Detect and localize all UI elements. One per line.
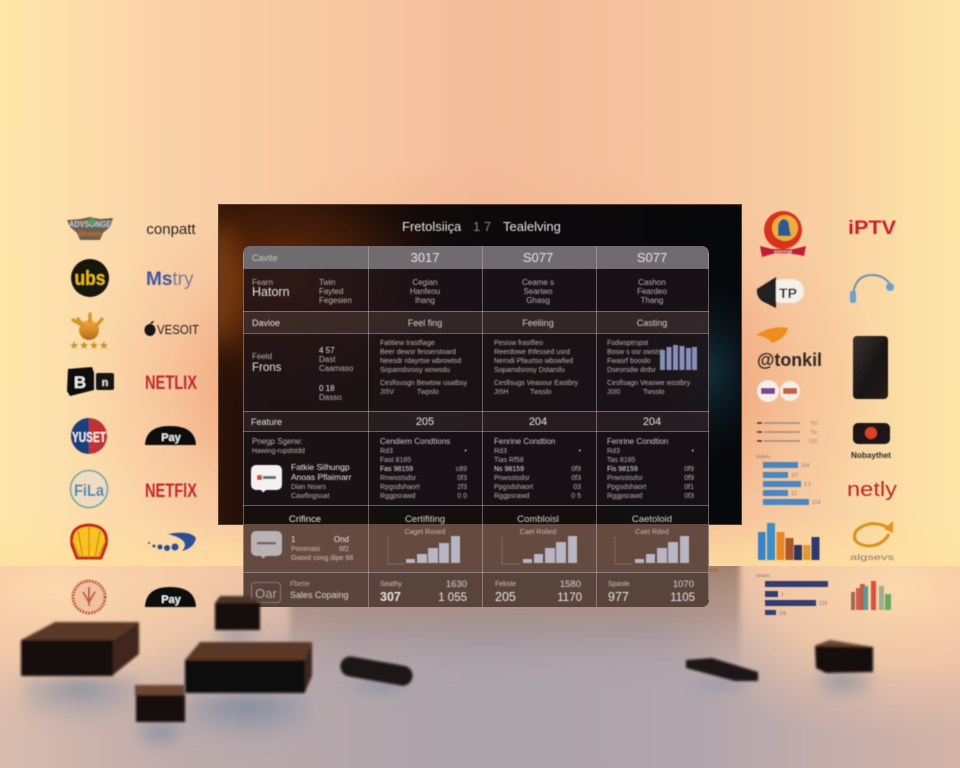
logo: Pay dome lower — [145, 587, 196, 607]
row: device details: 4 57 — [319, 346, 335, 355]
logo: orange swoosh — [756, 327, 788, 343]
bar chart column 1 — [388, 536, 460, 564]
television title — [402, 219, 561, 234]
row: platform: Cashon — [638, 278, 666, 287]
horizontal bar chart blue: 214 — [812, 500, 821, 506]
row: features details: • — [579, 448, 582, 455]
row: features details: Cawfingsuat — [291, 493, 330, 500]
row: sales figures: Fbette — [290, 581, 310, 588]
horizontal bar chart blue: 1:1 — [804, 482, 811, 488]
row: platform: Hatorn — [252, 285, 290, 299]
logo: shell — [72, 525, 106, 558]
row: sales figures: Sales Copaing — [290, 590, 349, 600]
row: certification charts: Caet Rded — [635, 529, 669, 536]
row: device details: JI5H — [494, 389, 508, 396]
logo: red badge with ribbon: pocnal — [774, 250, 792, 256]
row: platform: Fearn — [252, 278, 273, 287]
row: features details: Anoas Pflaimarr — [291, 472, 352, 482]
television title: Tealelving — [503, 219, 561, 234]
icon: smartphone — [853, 336, 888, 399]
box: right — [815, 640, 873, 673]
row: device details: 0 18 — [319, 384, 335, 393]
row: features details: 0f3 — [457, 475, 467, 482]
row: features heading: Feature — [251, 417, 282, 427]
logo: BN — [67, 367, 114, 396]
row: certification charts: 6f2 — [339, 546, 349, 553]
row: device details: Twpslo — [417, 389, 439, 396]
logo: gold mascot with stars: ★★★★ — [69, 340, 109, 352]
logo: red badge with ribbon — [760, 211, 806, 257]
row: features details: Rggpsrawd — [607, 493, 643, 500]
row: certification charts: Caget Roved — [405, 529, 446, 536]
television title: 1 7 — [473, 219, 491, 234]
logo: VESOIT wordmark — [144, 321, 199, 337]
row: device details: Dast — [319, 355, 336, 364]
logo: red TV: Nobaythet — [851, 451, 891, 460]
legend list — [757, 421, 817, 445]
row: features details: Rd3 — [380, 448, 393, 455]
row: features details: 0f3 — [684, 493, 694, 500]
logo: tonkil: @tonkil — [757, 350, 822, 370]
row: device details: Beer dewsr fesserstoard — [380, 349, 456, 356]
row: features details: Pnwsstsdsr — [607, 475, 643, 482]
logo: NETFLIX: NETFlX — [145, 481, 197, 502]
row: features details: Hawing-rupdstdd — [252, 448, 305, 455]
horizontal bar chart navy: Details — [756, 573, 771, 578]
row: device details: Bosw s osr owstsl — [607, 349, 663, 356]
table header row: S077 — [637, 250, 667, 265]
row: device details: J0I0 — [607, 389, 620, 396]
icon: gray chat bubble — [251, 531, 282, 558]
row: sales figures: 1105 — [670, 592, 695, 604]
row: features details: Rggpsrawd — [494, 493, 530, 500]
row: features details: Fatkie Silhungp — [291, 462, 350, 472]
row: sales figures: 205 — [495, 590, 516, 604]
mini bar chart in table — [660, 345, 697, 370]
row: device details: Cesfisagn Veaswe wsstbry — [607, 380, 691, 387]
legend list: 7Io — [810, 430, 817, 436]
row: features details: c89 — [456, 466, 467, 473]
row: features heading: 204 — [529, 416, 547, 428]
box: small front — [135, 685, 185, 722]
row: sales figures: 1170 — [557, 592, 582, 604]
logo: orange ring: algsevs — [850, 552, 894, 562]
logo: ubs: ubs — [74, 268, 106, 290]
television screen — [218, 204, 742, 572]
television title: Fretolsiiça — [402, 219, 462, 234]
row: features details: 0f1 — [684, 484, 694, 491]
horizontal bar chart blue: Details — [756, 454, 771, 459]
row: features details: Fast 8185 — [380, 457, 411, 464]
row: features details: Fas 98159 — [380, 466, 413, 473]
row: features details: Pnegp Sgene: — [252, 437, 303, 446]
logo: iPTV: iPTV — [848, 218, 896, 239]
row: device details: Cesfisugs Veasour Eastbry — [494, 380, 579, 387]
logo: YUSET — [71, 418, 107, 454]
row: sales figures: Spaste — [608, 581, 630, 588]
horizontal bar chart blue — [756, 454, 821, 506]
row: features details: Ppgsdshaort — [607, 484, 646, 491]
floor reflections — [22, 628, 873, 756]
icon: white chat bubble — [251, 465, 282, 492]
remote: right — [686, 658, 758, 681]
row: device details: Dasso — [319, 393, 342, 402]
box: small rear — [215, 596, 260, 630]
row: sales figures: Seathy — [380, 581, 402, 588]
logo: ubs — [71, 259, 109, 297]
left brand logos — [67, 217, 199, 613]
row: platform: Twin — [319, 278, 335, 287]
logo: red TV — [851, 423, 891, 460]
row: features details: • — [692, 448, 695, 455]
row: features details: • — [465, 448, 468, 455]
row: device details: Fatitiew trastfiage — [380, 340, 435, 347]
row: device heading: Casting — [637, 318, 667, 328]
row: certification heading: Crifince — [289, 514, 321, 525]
row: sales figures: 1580 — [560, 579, 581, 590]
row: platform: Fayted — [319, 287, 343, 296]
logo: red seal — [73, 581, 105, 613]
logo: Pay dome — [145, 426, 196, 445]
logo: game badge: ADVSONGE — [69, 220, 112, 229]
row: device details: Dseorsdw drdsr — [607, 367, 657, 374]
row: features details: 03 — [573, 484, 581, 491]
row: device heading: Feeliing — [522, 318, 554, 328]
logo: gold mascot with stars — [69, 314, 109, 352]
row: device details: Fsdwsptrspst — [607, 340, 648, 347]
row: features details: 0f9 — [684, 466, 694, 473]
box: large centre — [185, 642, 312, 693]
row: device heading — [252, 318, 667, 328]
row: device details: Reerdowe thfessed usrd — [494, 349, 570, 356]
row: sales figures: 977 — [608, 590, 629, 604]
row: device details: Cesfisusgn Bewtow usatbsy — [380, 380, 468, 387]
horizontal bar chart blue: 214 — [801, 463, 810, 469]
row: device details: JI5V — [380, 389, 394, 396]
icon: outlined badge: Oar — [255, 586, 278, 601]
set-top boxes and remotes on floor — [21, 596, 873, 756]
row: platform: Feardeo — [637, 287, 667, 296]
row: features details: Ns 98159 — [494, 466, 524, 473]
row: certification heading: Certifiting — [405, 514, 445, 525]
row: features details: Tias Rf58 — [494, 457, 524, 464]
TV stand foot — [708, 568, 718, 572]
row: device details: Pesisw frastfieo — [494, 340, 543, 347]
row: certification charts: Ponenais — [291, 546, 321, 553]
row: certification charts: 1 — [291, 535, 296, 544]
row: platform: Hanfeou — [410, 287, 440, 296]
multicolour bar chart small — [851, 581, 891, 610]
row: device details: Fwasrf booslo — [607, 358, 651, 365]
logo: netly: netly — [847, 479, 897, 501]
horizontal bar chart navy: 1 — [781, 592, 784, 598]
row: device details: Twsslo — [643, 389, 664, 396]
logo: Pay dome: Pay — [161, 432, 182, 444]
logo: game badge: Stream — [78, 231, 102, 238]
row: device details — [252, 340, 697, 402]
box: large left — [21, 622, 139, 676]
logo: dotted swoosh — [148, 533, 196, 551]
logo: Mstry: Mstry — [146, 269, 194, 290]
table grid lines — [243, 246, 709, 607]
row: device details: Sopamdsrosy wowsdu — [380, 367, 450, 374]
row: device heading: Feel fing — [408, 318, 442, 328]
row: features heading: 205 — [416, 416, 434, 428]
logo: orange ring — [850, 521, 894, 562]
legend list: 100 — [809, 439, 817, 445]
row: platform: Cegian — [412, 278, 438, 287]
logo: NETLIX: NETLIX — [145, 373, 197, 394]
row: features details: Rd3 — [494, 448, 507, 455]
logo: paired circles — [757, 380, 800, 402]
logo: TP speech horn: TP — [779, 285, 797, 301]
row: device details: Neesdr rdayrtse wbrowtsd — [380, 358, 461, 365]
row: features heading — [251, 416, 661, 428]
logo: YUSET: YUSET — [72, 429, 106, 446]
row: features details: 2f3 — [457, 484, 467, 491]
row: device details: Sopamdsrosy Dstarsfu — [494, 367, 565, 374]
row: features details: Fenrine Condtion — [494, 437, 555, 446]
horizontal bar chart blue: 1Z — [791, 491, 797, 497]
row: features details — [251, 437, 695, 500]
logo: FiLa — [70, 470, 108, 508]
bar chart column 3 — [615, 536, 689, 564]
multicolour bar chart — [758, 523, 820, 560]
row: features details: Rnwsstsdsr — [380, 475, 417, 482]
row: features details: Fenrine Condtion — [607, 437, 668, 446]
row: features details: Ppgsdshaort — [494, 484, 533, 491]
row: features details: Pnwsstsdsr — [494, 475, 530, 482]
icon: headphones — [850, 275, 894, 303]
row: features details: Cendiem Condtions — [380, 437, 450, 446]
row: features details: Rpgsdshaort — [380, 484, 420, 491]
row: features heading: 204 — [643, 416, 661, 428]
row: features details: Rd3 — [607, 448, 620, 455]
row: platform: Ceame s — [522, 278, 554, 287]
horizontal bar chart navy — [756, 573, 828, 617]
row: platform — [252, 278, 667, 305]
logo: BN: n — [102, 377, 109, 389]
row: certification charts: Caet Rolied — [520, 529, 556, 536]
row: features details: 0 5 — [571, 493, 581, 500]
table header row: 3017 — [411, 250, 439, 265]
row: features details: Rggpsrawd — [380, 493, 416, 500]
row: sales figures: 1070 — [673, 579, 694, 590]
row: platform: Ihang — [415, 296, 435, 305]
row: platform: Fegesien — [319, 296, 352, 305]
row: features details: 0f9 — [571, 466, 581, 473]
row: features details: Fis 98159 — [607, 466, 638, 473]
remote: left — [339, 655, 414, 687]
row: sales figures — [252, 579, 695, 604]
row: features details: 0f3 — [571, 475, 581, 482]
row: device details: Caamaso — [319, 364, 354, 373]
row: platform: Ghasg — [526, 296, 550, 305]
horizontal bar chart navy: 1/9 — [779, 611, 786, 617]
row: features details: Dian Noars — [291, 484, 327, 491]
row: sales figures: 1630 — [446, 579, 467, 590]
row: features details: Tas 8185 — [607, 457, 636, 464]
logo: Pay dome lower: Pay — [161, 594, 182, 606]
table row backgrounds — [243, 246, 709, 607]
bar chart column 2 — [502, 536, 577, 564]
icon: outlined badge — [252, 582, 280, 602]
table header row: Cavite — [252, 253, 278, 263]
row: platform: Seariwo — [524, 287, 553, 296]
row: features details: 0f9 — [684, 475, 694, 482]
horizontal bar chart navy: 219 — [819, 601, 828, 607]
row: certification charts — [251, 529, 689, 564]
row: device details: Nerndi Pfaurtso wbswfwd — [494, 358, 573, 365]
table header row: S077 — [523, 250, 553, 265]
legend list: 7I0 — [810, 421, 817, 427]
horizontal bar chart blue: 1/7 — [791, 473, 798, 479]
row: certification heading — [289, 514, 672, 525]
logo: FiLa: FiLa — [74, 481, 104, 500]
row: sales figures: 1 055 — [438, 592, 467, 604]
row: device details: Frons — [252, 362, 282, 374]
row: device details: Twsslo — [530, 389, 552, 396]
row: certification heading: Caetoloid — [632, 514, 672, 525]
row: device details: Feeld — [252, 352, 272, 361]
table header row — [252, 250, 667, 265]
row: certification charts: Ond — [334, 535, 349, 544]
row: certification heading: Combloisl — [517, 514, 559, 525]
logo: TP speech horn — [757, 277, 804, 308]
logo: BN: B — [74, 373, 86, 392]
logo: VESOIT wordmark: VESOIT — [157, 322, 199, 337]
row: device heading: Davioe — [252, 318, 280, 328]
row: certification charts: Gwoot cong dipe 68 — [291, 555, 353, 562]
logo: conpatt: conpatt — [146, 221, 196, 238]
row: platform: Thang — [641, 296, 663, 305]
row: sales figures: 307 — [380, 590, 401, 604]
row: sales figures: Fekste — [495, 581, 516, 588]
right brand logos — [756, 211, 897, 617]
logo: game badge — [67, 217, 113, 240]
row: features details: 0 0 — [457, 493, 467, 500]
comparison table — [243, 246, 709, 607]
